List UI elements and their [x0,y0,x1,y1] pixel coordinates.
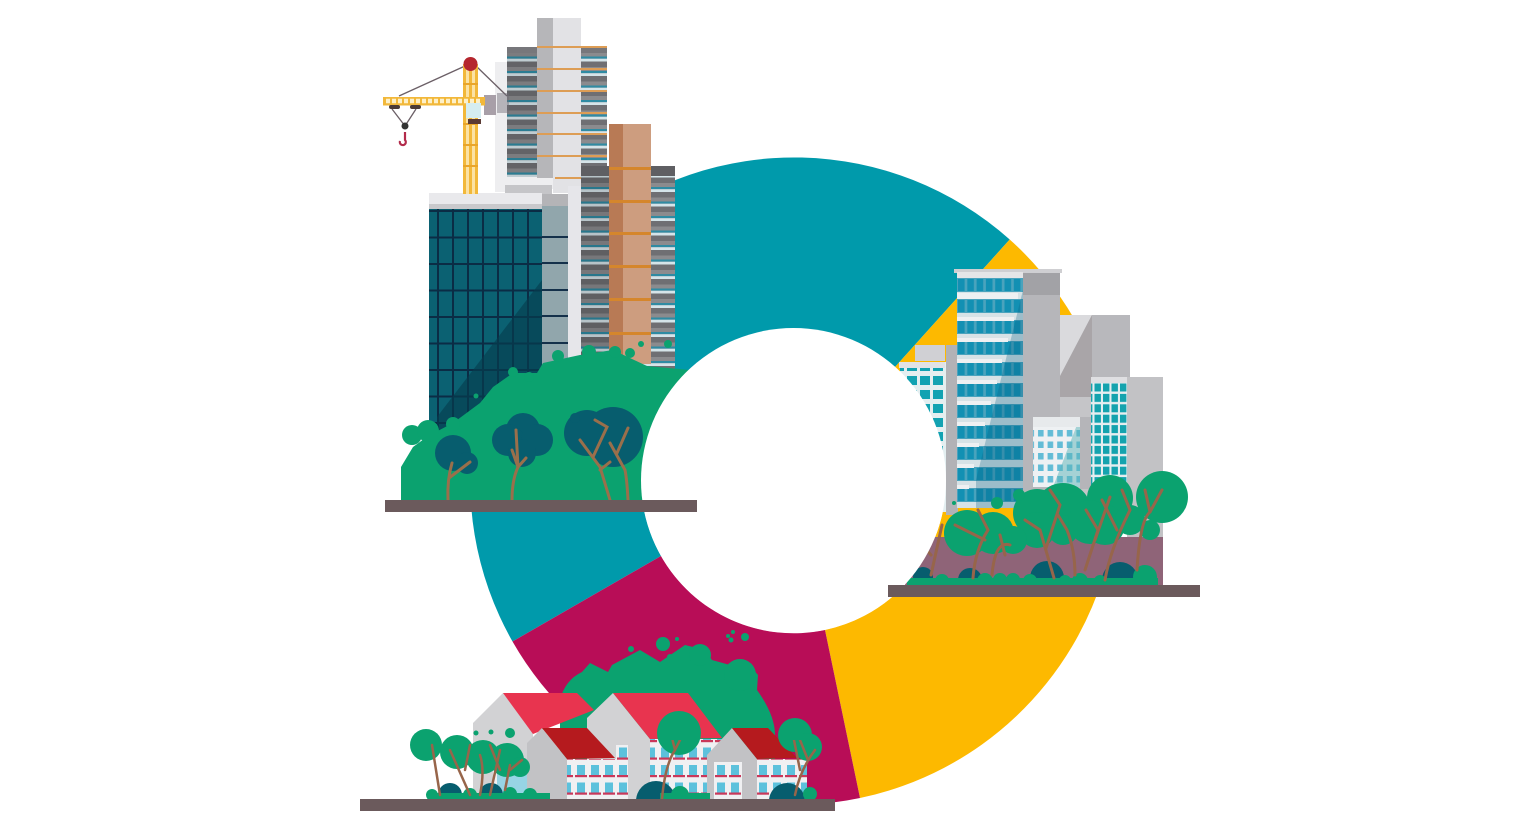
house: back left house [473,693,594,799]
building: teal window block [1091,377,1127,489]
donut segment: teal [470,157,1010,642]
building: pale small window block [1033,417,1091,489]
building: pale back block [495,62,509,192]
building: tall striped tower [507,18,607,193]
wall: purple base wall [905,537,1163,585]
illustration: high-rise city cluster [383,18,1188,821]
house: centre tall house [587,693,722,799]
ledge: right cluster shelf [888,585,1200,597]
foliage: crimson-side bush behind houses [560,630,775,770]
building: pale back towers [1042,315,1163,542]
building: main blue tower [954,269,1062,525]
foliage: green bush backdrop [401,340,690,500]
trees: right tree row [907,471,1188,585]
donut segment: crimson [512,556,860,805]
building: brown core tower [581,124,675,371]
ledge: city block shelf [385,500,697,512]
trees: bottom tree row and shrubs [410,711,822,799]
building: small left block behind circle [899,345,958,515]
building: pale podium [505,185,581,371]
house: front right house [707,728,807,799]
ledge: housing shelf [360,799,835,811]
infographic: donut chart with buildings [360,18,1200,811]
donut segment: yellow [825,240,1118,798]
trees: dark tree crowns with branches [435,407,643,500]
icon: construction crane [383,57,509,194]
house: front left house [527,728,616,799]
building: glass office block [429,193,568,434]
donut hole: white centre [641,328,946,633]
